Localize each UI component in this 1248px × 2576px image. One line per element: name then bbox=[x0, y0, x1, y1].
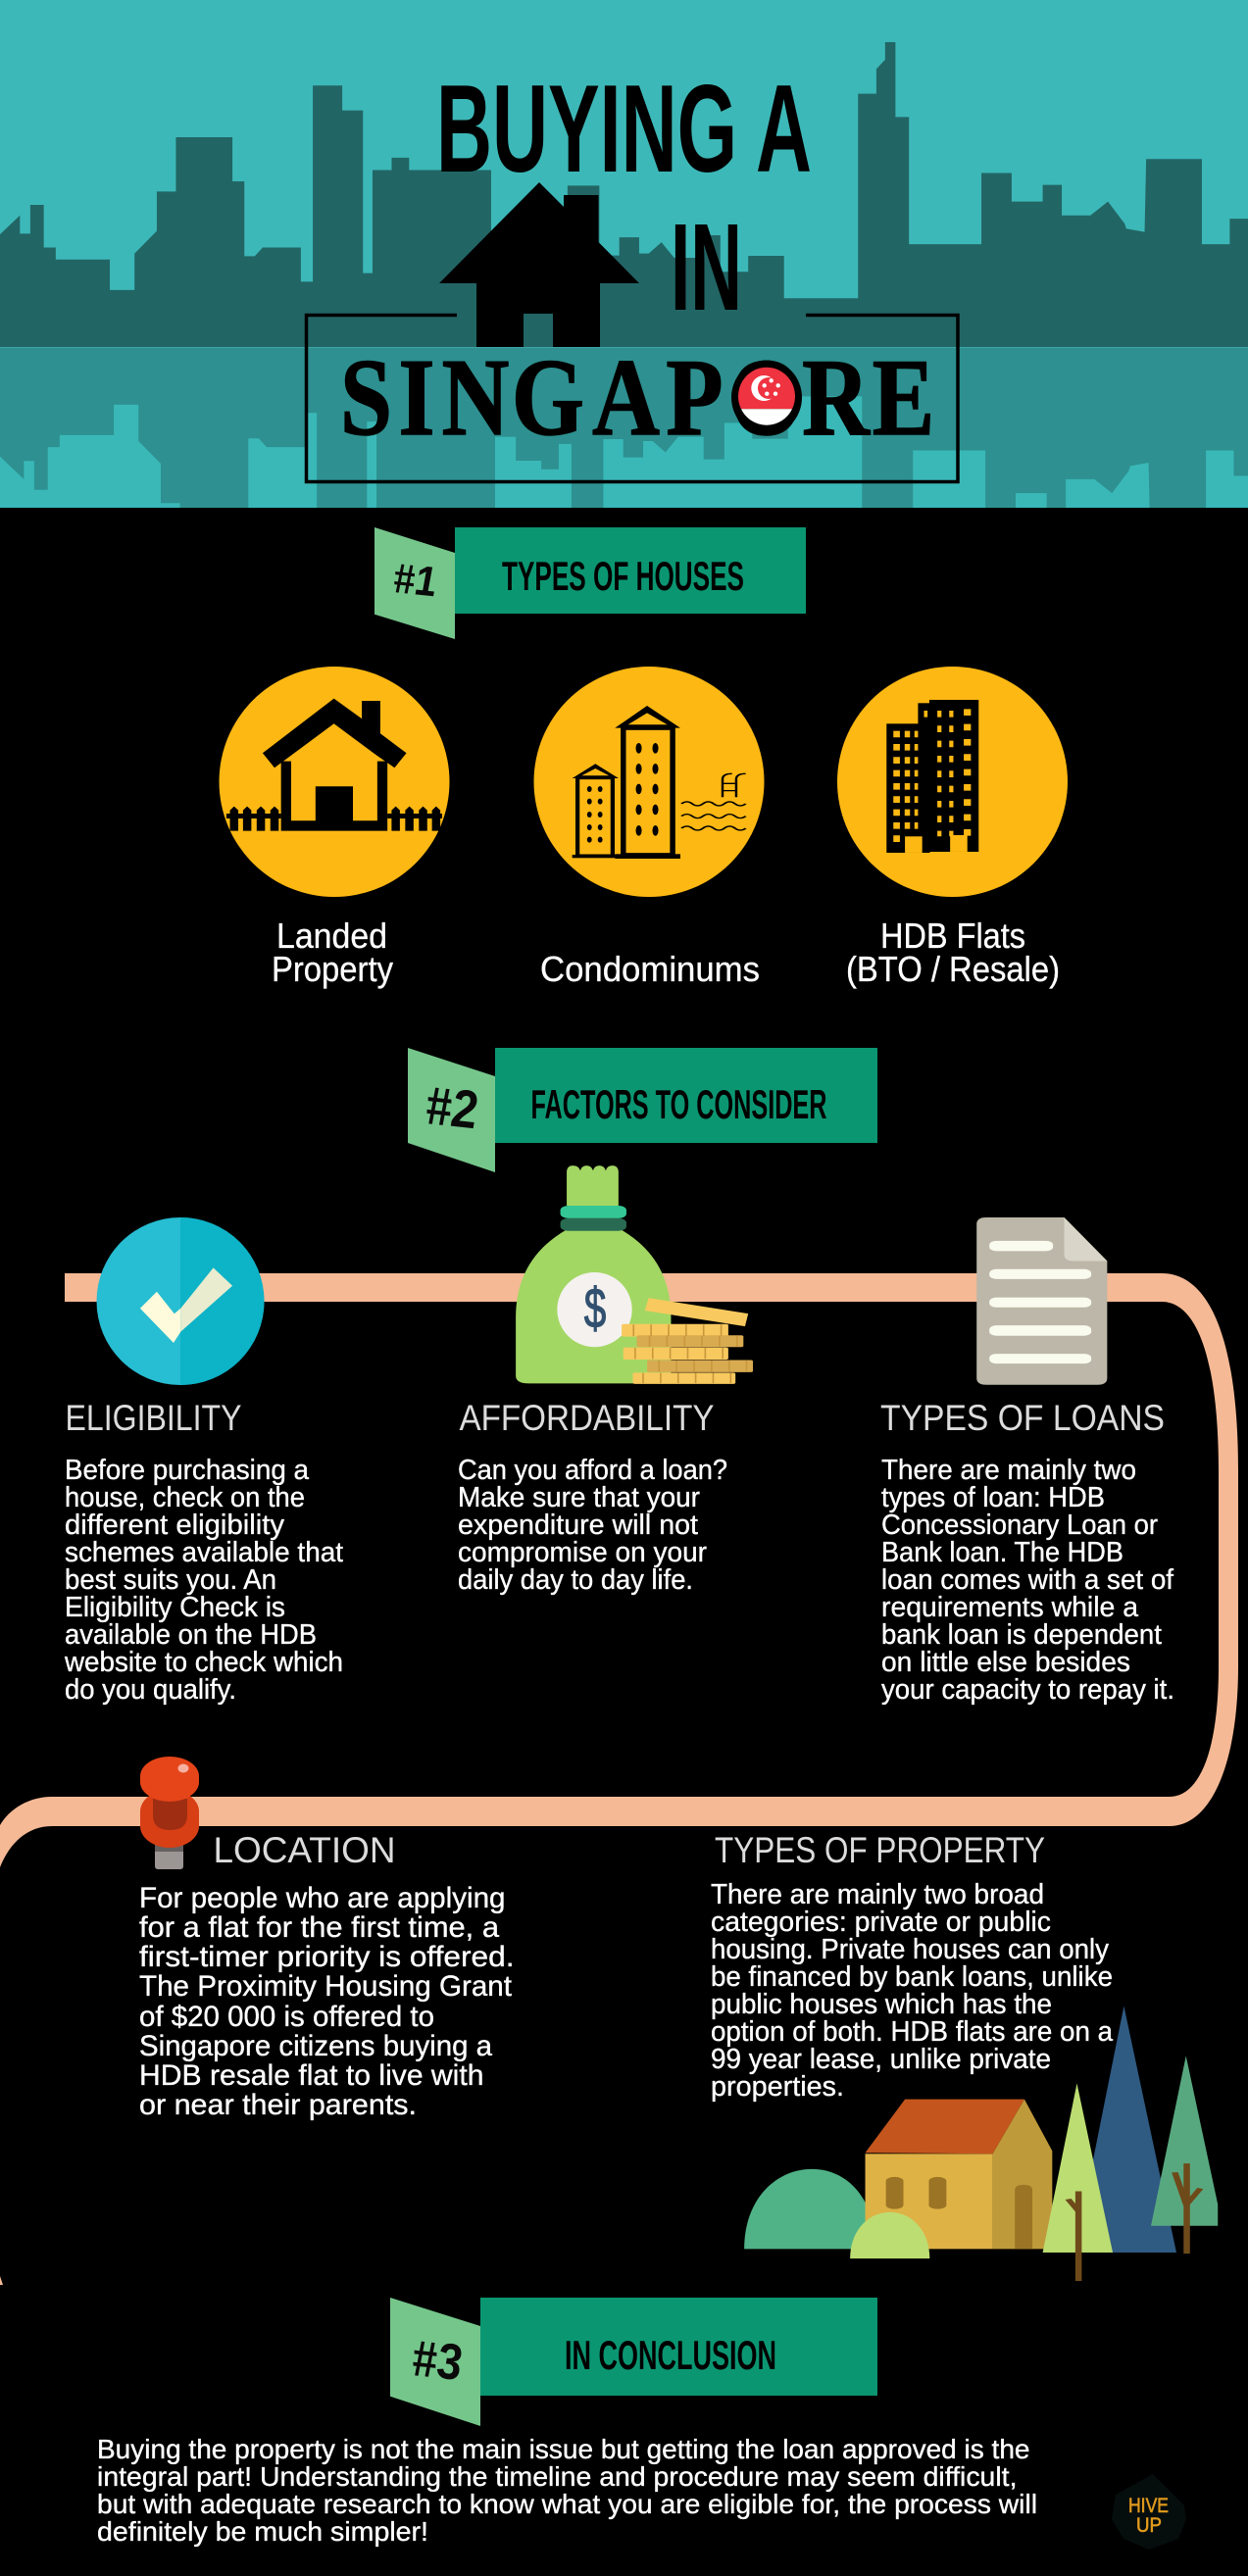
header: city skyline background bbox=[0, 0, 1248, 653]
section title: in conclusion: IN CONCLUSION bbox=[565, 2332, 776, 2378]
label: landed property: Property bbox=[272, 949, 393, 989]
heading: affordability: AFFORDABILITY bbox=[459, 1398, 714, 1438]
text: location: or near their parents. bbox=[139, 2089, 417, 2121]
text: affordability: compromise on your bbox=[458, 1537, 707, 1568]
text: types of property: properties. bbox=[711, 2071, 844, 2103]
section number 2: #2 bbox=[425, 1074, 477, 1141]
title frame bbox=[306, 316, 958, 482]
icon: condominium bbox=[533, 667, 765, 897]
text: location: first-timer priority is offered. bbox=[139, 1941, 514, 1973]
conclusion text bbox=[97, 2434, 1037, 2547]
text: types of property: categories: private or public bbox=[711, 1907, 1051, 1938]
section banner 2 bbox=[408, 1048, 877, 1172]
text: eligibility: available on the HDB bbox=[65, 1619, 317, 1651]
conclusion text: integral part! Understanding the timeline and procedure may seem difficult, bbox=[97, 2461, 1018, 2492]
landed property bbox=[220, 667, 449, 989]
title line: in: IN bbox=[671, 198, 742, 336]
text: affordability bbox=[458, 1455, 727, 1596]
text: location: for a flat for the first time, a bbox=[139, 1911, 499, 1944]
text: types of loans: your capacity to repay it. bbox=[881, 1674, 1174, 1706]
section banner 1 bbox=[374, 527, 806, 639]
text: eligibility: website to check which bbox=[64, 1647, 343, 1678]
text: affordability: expenditure will not bbox=[458, 1510, 698, 1541]
text: types of property: 99 year lease, unlike private bbox=[711, 2044, 1051, 2075]
text: location bbox=[139, 1882, 514, 2121]
logo: hive up bbox=[1112, 2474, 1186, 2550]
panel: affordability bbox=[458, 1165, 753, 1596]
heading: location: LOCATION bbox=[214, 1830, 396, 1870]
text: affordability: Make sure that your bbox=[458, 1482, 700, 1513]
icon: map pin bbox=[140, 1757, 199, 1869]
section banner 3 bbox=[390, 2298, 877, 2426]
title bbox=[306, 59, 958, 482]
conclusion text: definitely be much simpler! bbox=[97, 2516, 428, 2547]
section number 1: #1 bbox=[393, 555, 436, 607]
text: types of loans: on little else besides bbox=[881, 1647, 1130, 1678]
text: location: of $20 000 is offered to bbox=[139, 2001, 434, 2033]
text: eligibility: schemes available that bbox=[65, 1537, 343, 1568]
heading: types of property: TYPES OF PROPERTY bbox=[715, 1830, 1045, 1870]
condominiums bbox=[533, 667, 765, 989]
icon: money bag with coins bbox=[516, 1165, 753, 1384]
text: affordability: Can you afford a loan? bbox=[458, 1455, 727, 1486]
conclusion text: but with adequate research to know what you are eligible for, the process will bbox=[97, 2489, 1037, 2519]
text: eligibility: Eligibility Check is bbox=[65, 1592, 285, 1623]
text: affordability: daily day to day life. bbox=[458, 1564, 693, 1596]
tick mark at left edge bbox=[0, 2276, 3, 2285]
text: types of property: housing. Private houses can only bbox=[711, 1934, 1109, 1965]
label: landed property bbox=[272, 916, 393, 989]
title line: singapore: SINGAPORE bbox=[340, 337, 934, 459]
text: types of loans: types of loan: HDB bbox=[881, 1482, 1105, 1513]
logo: hive up: HIVE bbox=[1128, 2495, 1169, 2517]
text: eligibility: best suits you. An bbox=[65, 1564, 276, 1596]
hdb flats bbox=[837, 667, 1068, 989]
text: eligibility: do you qualify. bbox=[65, 1674, 236, 1706]
text: eligibility bbox=[64, 1455, 343, 1706]
text: eligibility: house, check on the bbox=[65, 1482, 305, 1513]
text: types of loans: Concessionary Loan or bbox=[881, 1510, 1158, 1541]
panel: types of loans bbox=[880, 1217, 1174, 1706]
section title: types of houses: TYPES OF HOUSES bbox=[502, 553, 744, 599]
panel: house types bbox=[220, 667, 1068, 989]
label: condominiums: Condominums bbox=[540, 949, 760, 989]
label: hdb flats: HDB Flats bbox=[880, 916, 1025, 956]
panel: types of property bbox=[711, 1830, 1218, 2281]
section number 3: #3 bbox=[412, 2330, 462, 2392]
text: location: HDB resale flat to live with bbox=[139, 2059, 484, 2092]
text: types of property: option of both. HDB flats are on a bbox=[711, 2016, 1114, 2048]
text: location: Singapore citizens buying a bbox=[139, 2030, 492, 2062]
icon: house in title bbox=[439, 182, 639, 347]
label: landed property: Landed bbox=[276, 916, 387, 956]
text: types of loans: There are mainly two bbox=[881, 1455, 1136, 1486]
icon: money bag with coins: $ bbox=[584, 1276, 606, 1340]
icon: document bbox=[976, 1217, 1107, 1385]
heading: eligibility: ELIGIBILITY bbox=[65, 1398, 241, 1438]
section title: factors to consider: FACTORS TO CONSIDER bbox=[531, 1081, 827, 1127]
text: types of loans: requirements while a bbox=[881, 1592, 1139, 1623]
text: eligibility: Before purchasing a bbox=[65, 1455, 310, 1486]
text: types of loans: Bank loan. The HDB bbox=[881, 1537, 1123, 1568]
text: location: For people who are applying bbox=[139, 1882, 506, 1914]
icon: hdb flats bbox=[837, 667, 1068, 897]
logo: hive up: UP bbox=[1136, 2514, 1162, 2537]
text: types of property: There are mainly two broad bbox=[711, 1879, 1044, 1910]
panel: location bbox=[139, 1757, 514, 2121]
connector track bbox=[0, 1273, 1238, 1867]
text: types of loans bbox=[881, 1455, 1174, 1706]
icon: landed house bbox=[220, 667, 449, 897]
label: hdb flats: (BTO / Resale) bbox=[846, 949, 1060, 989]
text: types of property bbox=[711, 1879, 1114, 2103]
panel: eligibility bbox=[64, 1217, 343, 1706]
icon: check badge bbox=[96, 1217, 265, 1385]
heading: types of loans: TYPES OF LOANS bbox=[880, 1398, 1165, 1438]
label: hdb flats bbox=[846, 916, 1060, 989]
text: types of loans: loan comes with a set of bbox=[881, 1564, 1174, 1596]
text: types of loans: bank loan is dependent bbox=[881, 1619, 1162, 1651]
text: location: The Proximity Housing Grant bbox=[139, 1970, 513, 2003]
illustration: house and trees bbox=[744, 2006, 1218, 2281]
icon: singapore flag in letter O bbox=[731, 361, 802, 435]
title line: buying a: BUYING A bbox=[436, 59, 812, 198]
text: types of property: public houses which has the bbox=[711, 1989, 1052, 2020]
conclusion text: Buying the property is not the main issue but getting the loan approved is the bbox=[97, 2434, 1029, 2464]
text: eligibility: different eligibility bbox=[65, 1510, 285, 1541]
text: types of property: be financed by bank loans, unlike bbox=[711, 1961, 1113, 1993]
